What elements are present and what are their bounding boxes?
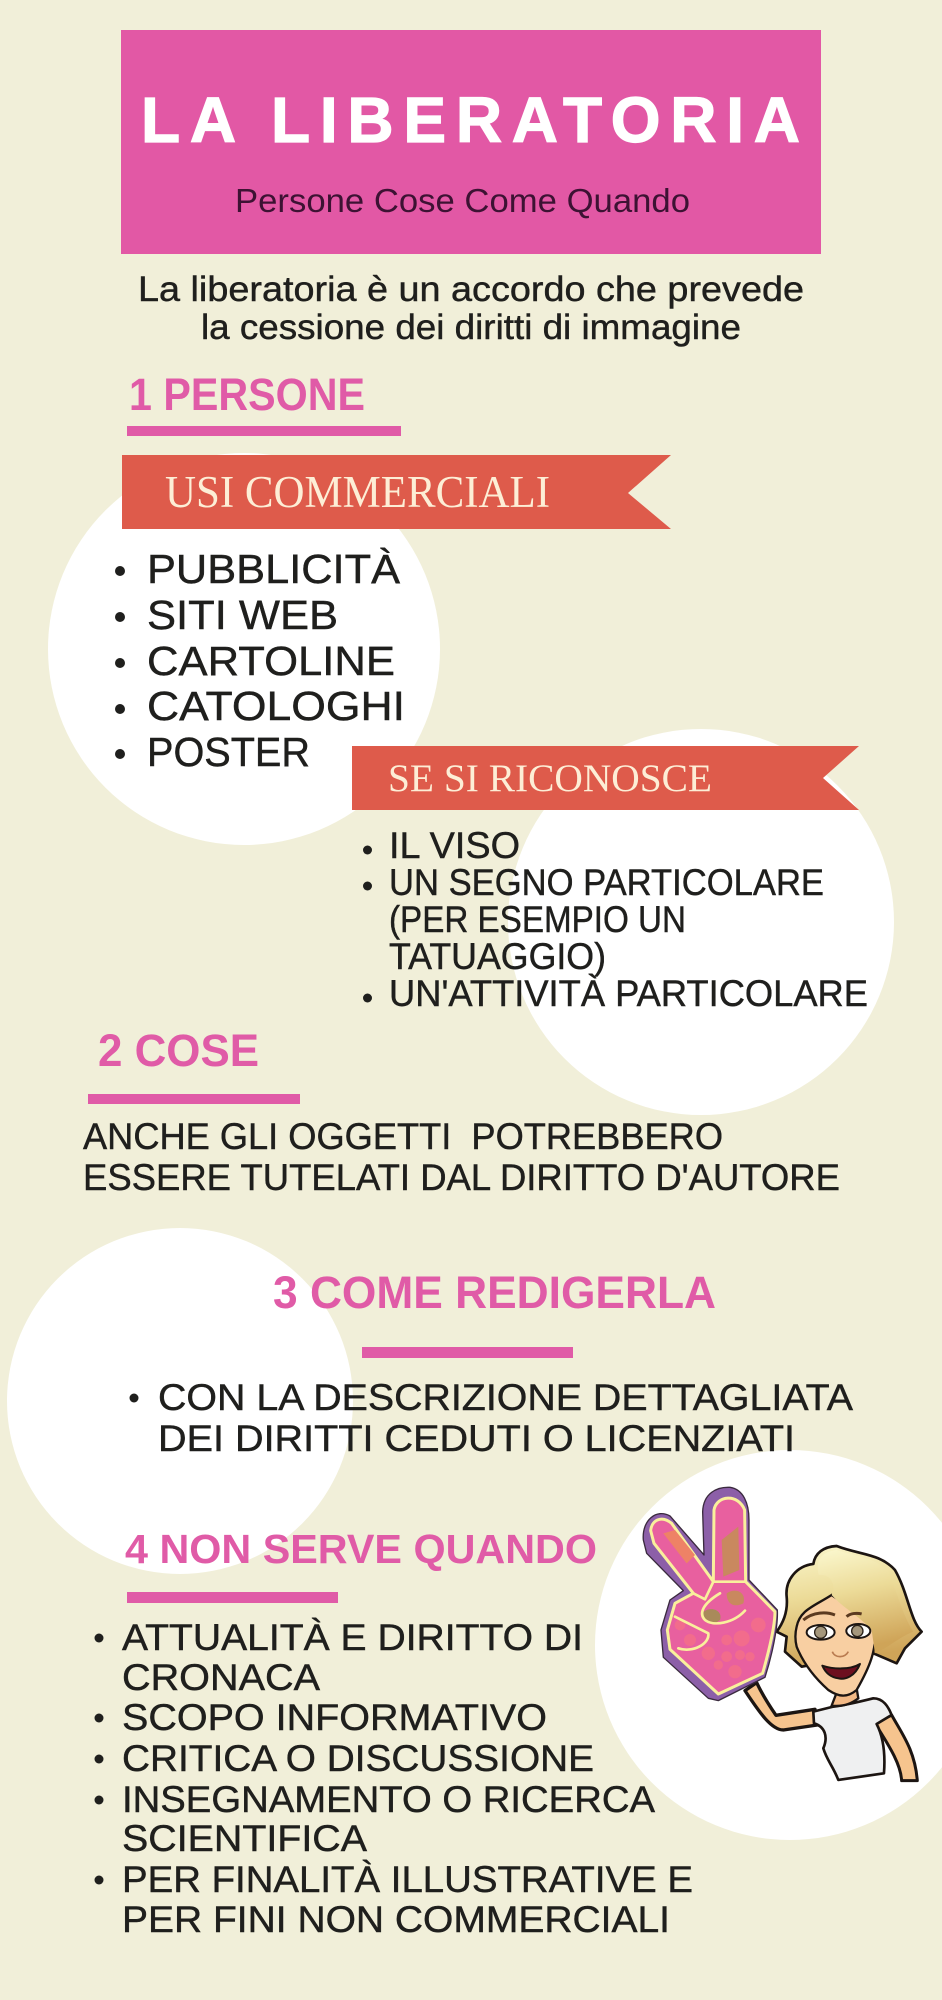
background circle: se si riconosce [508, 729, 894, 1115]
background circle: avatar [595, 1450, 942, 1840]
heading: 3 come redigerla [273, 1267, 716, 1358]
list: come redigerla [130, 1377, 853, 1459]
list: non serve quando [94, 1617, 693, 1940]
foam hand pattern [663, 1527, 766, 1678]
avatar mouth [822, 1664, 860, 1679]
foam hand back [643, 1487, 777, 1701]
list: usi commerciali: SITI WEB [147, 592, 338, 638]
heading: 1 persone: 1 PERSONE [129, 369, 365, 420]
list: usi commerciali: PUBBLICITÀ [147, 546, 401, 592]
heading: 2 cose: 2 COSE [98, 1025, 259, 1076]
avatar neck [832, 1688, 858, 1706]
avatar arm [745, 1683, 817, 1730]
avatar face [795, 1595, 875, 1696]
list: non serve quando: INSEGNAMENTO O RICERCA [122, 1779, 655, 1820]
title banner [121, 30, 821, 254]
list: come redigerla: CON LA DESCRIZIONE DETTAGLIATA [158, 1377, 853, 1418]
foam hand front [651, 1498, 775, 1694]
heading: 3 come redigerla: 3 COME REDIGERLA [273, 1267, 716, 1318]
list: se si riconosce: IL VISO [389, 825, 520, 866]
avatar nose [832, 1652, 848, 1657]
title: LA LIBERATORIA [141, 84, 800, 156]
heading: 2 cose [88, 1025, 300, 1104]
heading: 4 non serve quando: 4 NON SERVE QUANDO [125, 1526, 597, 1572]
list: non serve quando: PER FINALITÀ ILLUSTRATIVE E [122, 1859, 693, 1900]
intro text: la cessione dei diritti di immagine [201, 308, 741, 347]
avatar far arm [875, 1715, 917, 1781]
list: se si riconosce: TATUAGGIO) [389, 936, 606, 977]
ribbon: usi commerciali [122, 455, 671, 529]
heading: 4 non serve quando [125, 1526, 597, 1603]
list: come redigerla: DEI DIRITTI CEDUTI O LICENZIATI [158, 1418, 795, 1459]
avatar hair fringe [818, 1550, 913, 1653]
list: non serve quando: SCIENTIFICA [122, 1818, 367, 1859]
avatar eyes [803, 1613, 870, 1640]
intro text: La liberatoria è un accordo che prevede [138, 270, 804, 309]
list: usi commerciali [115, 546, 405, 775]
avatar hair back [777, 1546, 922, 1667]
text: cose: ANCHE GLI OGGETTI POTREBBERO [83, 1116, 723, 1157]
intro text [138, 270, 804, 347]
list: se si riconosce: UN SEGNO PARTICOLARE [389, 862, 824, 903]
list: non serve quando: CRITICA O DISCUSSIONE [122, 1738, 594, 1779]
background circle: usi commerciali [48, 453, 440, 845]
list: se si riconosce: (PER ESEMPIO UN [389, 899, 686, 940]
list: se si riconosce [363, 825, 868, 1014]
text: cose [83, 1116, 840, 1198]
avatar shirt [813, 1698, 892, 1780]
text: cose: ESSERE TUTELATI DAL DIRITTO D'AUTORE [83, 1157, 840, 1198]
list: non serve quando: CRONACA [122, 1657, 320, 1698]
list: usi commerciali: CATOLOGHI [147, 683, 405, 729]
list: non serve quando: SCOPO INFORMATIVO [122, 1697, 547, 1738]
subtitle: Persone Cose Come Quando [235, 182, 690, 219]
list: usi commerciali: CARTOLINE [147, 638, 395, 684]
icon: avatar with foam peace-sign hand [643, 1487, 922, 1781]
ribbon: se si riconosce: SE SI RICONOSCE [388, 757, 712, 800]
foam hand fingers [675, 1582, 746, 1650]
background circle: come redigerla [7, 1228, 353, 1574]
ribbon: se si riconosce [352, 746, 859, 810]
list: non serve quando: ATTUALITÀ E DIRITTO DI [122, 1617, 583, 1658]
list: se si riconosce: UN'ATTIVITÀ PARTICOLARE [389, 973, 868, 1014]
ribbon: usi commerciali: USI COMMERCIALI [165, 467, 550, 517]
list: usi commerciali: POSTER [147, 729, 310, 775]
list: non serve quando: PER FINI NON COMMERCIALI [122, 1899, 670, 1940]
